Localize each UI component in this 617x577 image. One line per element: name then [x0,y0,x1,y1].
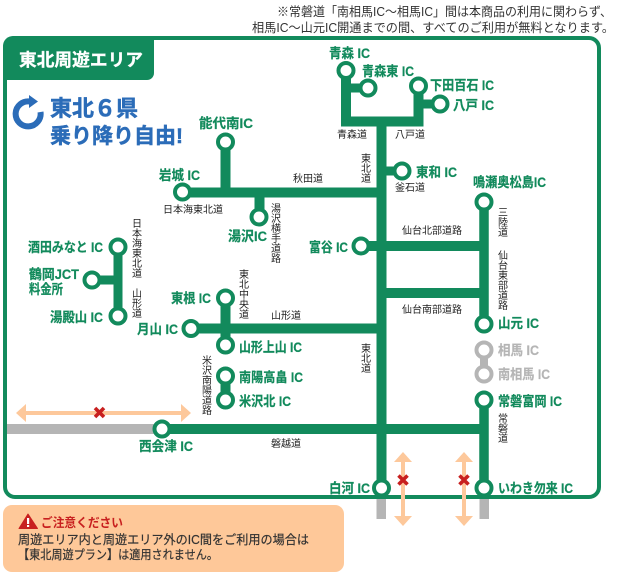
interchange labels: 米沢北 IC [239,393,291,409]
header note: 相馬IC～山元IC開通までの間、すべてのご利用が無料となります。 [252,20,614,35]
callout: caution: 周遊エリア内と周遊エリア外のIC間をご利用の場合は [18,532,309,547]
interchange labels: 南相馬 IC [498,367,550,382]
interchange labels: 青森 IC [329,45,370,61]
header note [252,4,614,35]
interchange labels: 下田百石 IC [430,78,494,93]
arrow: no-go vertical right [455,452,473,526]
header note: ※常磐道「南相馬IC～相馬IC」間は本商品の利用に関わらず、 [277,4,612,19]
interchange labels: 月山 IC [137,322,178,337]
interchange labels: 湯殿山 IC [50,309,103,325]
interchange labels: 西会津 IC [139,439,193,454]
panel: area frame [5,38,599,497]
interchange labels [28,45,573,496]
callout: caution [3,505,344,572]
heading tab: area title [3,36,154,80]
road name labels: 湯沢横手道路 [268,202,280,264]
interchange labels: いわき勿来 IC [498,480,573,496]
heading tab: area title: 東北周遊エリア [19,50,143,70]
interchange labels: 八戸 IC [453,98,494,113]
road name labels: 釜石道 [395,181,425,194]
interchange labels: 酒田みなと IC [28,240,103,255]
interchange labels: 岩城 IC [159,167,200,183]
road name labels: 東北道 [358,342,370,373]
road name labels: 八戸道 [395,128,425,141]
road name labels: 山形道 [130,288,142,318]
road name labels: 東北中央道 [236,268,248,319]
road name labels: 青森道 [337,128,367,141]
interchange labels: 南陽高畠 IC [239,369,303,385]
interchange labels: 白河 IC [329,480,370,496]
interchange labels: 東和 IC [416,165,457,180]
road name labels: 仙台北部道路 [402,224,462,237]
interchange labels: 鶴岡JCT [29,266,80,282]
arrow: no-go horizontal [16,404,191,422]
callout: caution: ご注意ください [41,515,123,530]
road name labels: 三陸道 [496,207,508,237]
slogan: 東北６県 [50,96,138,121]
interchange labels: 料金所 [29,281,63,297]
icon: circular arrow [16,95,41,126]
slogan: 乗り降り自由! [50,125,183,148]
icon: warning triangle [19,514,38,528]
interchange labels: 富谷 IC [309,240,348,255]
road name labels: 山形道 [271,309,301,322]
road name labels: 米沢南陽道路 [200,354,212,416]
road name labels: 常磐道 [496,412,508,443]
interchange labels: 東根 IC [171,290,211,306]
interchange labels: 青森東 IC [362,63,414,79]
road name labels: 磐越道 [271,437,301,450]
road name labels: 仙台南部道路 [402,303,462,316]
road name labels: 秋田道 [293,172,323,185]
interchange labels: 常磐富岡 IC [498,393,562,409]
slogan [50,96,183,148]
road name labels: 東北道 [358,152,370,183]
interchange labels: 能代南IC [199,115,253,131]
interchange labels: 湯沢IC [228,228,267,244]
interchange labels: 鳴瀬奥松島IC [473,174,546,190]
callout: caution: 【東北周遊プラン】は適用されません。 [18,547,218,562]
road name labels: 日本海東北道 [163,203,223,216]
interchange labels: 山元 IC [498,316,539,331]
outside-area grey roads [7,350,489,519]
arrow: no-go vertical left [394,452,412,526]
interchange nodes [84,63,492,496]
interchange labels: 相馬 IC [498,343,539,358]
road name labels [130,128,508,450]
interchange labels: 山形上山 IC [239,340,302,355]
expressway network lines [92,70,484,488]
road name labels: 仙台東部道路 [496,249,508,311]
road name labels: 日本海東北道 [130,218,142,278]
